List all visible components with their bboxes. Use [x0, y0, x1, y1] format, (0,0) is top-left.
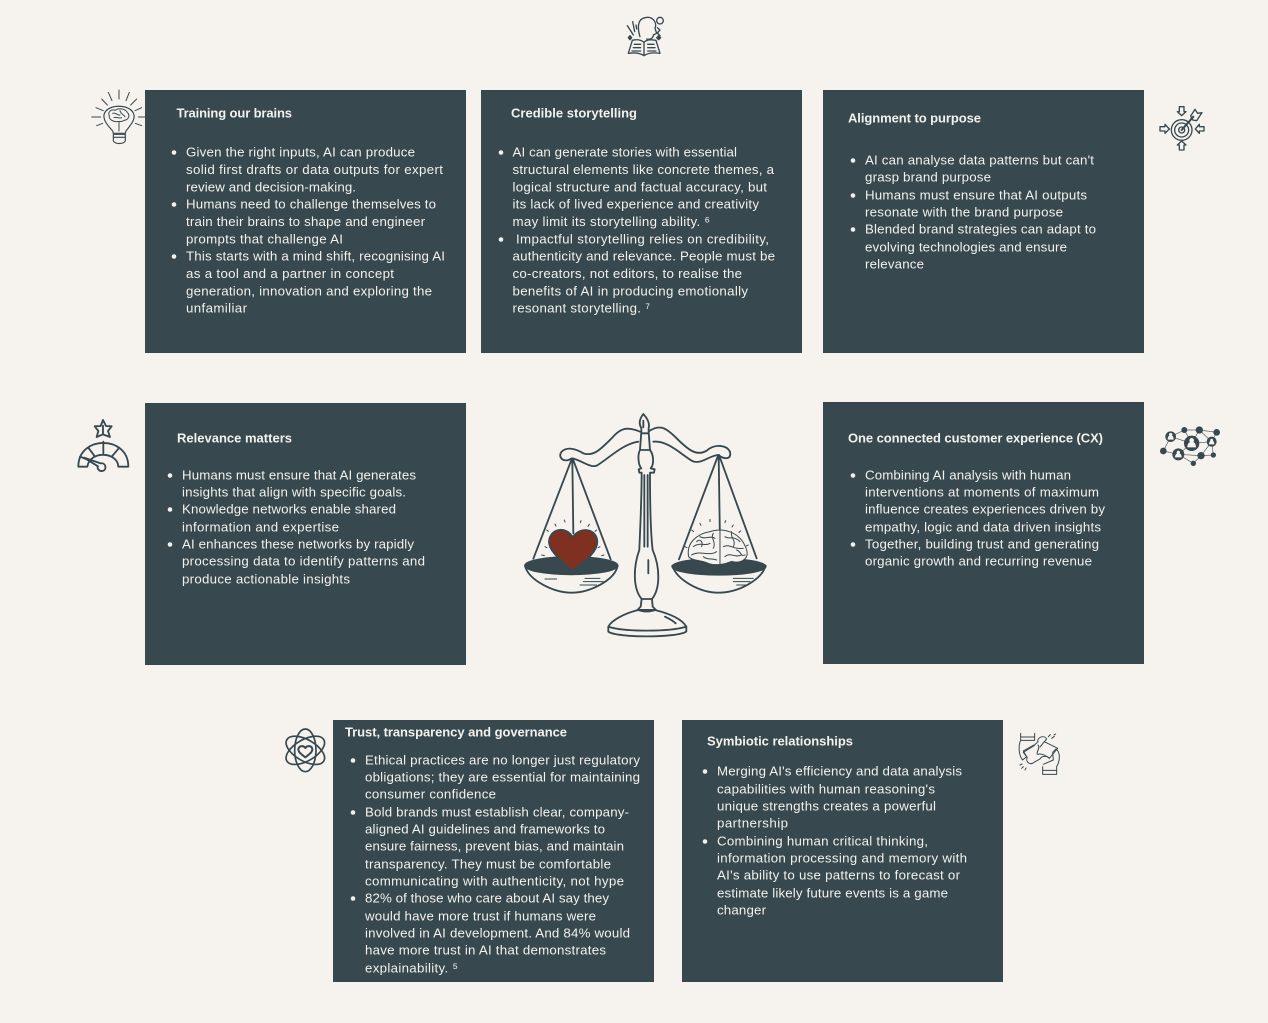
bullet list: Alignment to purpose: Humans must ensure that AI outputs: [865, 188, 1087, 202]
heading: Relevance matters: Relevance matters: [177, 430, 292, 446]
bullet list: Relevance matters: insights that align with specific goals.: [182, 484, 406, 500]
heading: One connected customer experience (CX): One connected customer experience (CX): [848, 430, 1103, 446]
bullet list: Training our brains: This starts with a mind shift, recognising AI: [186, 248, 445, 264]
bullet list: Credible storytelling: [499, 144, 775, 316]
bullet list: Training our brains: [172, 144, 445, 316]
heading: Credible storytelling: Credible storytelling: [511, 106, 637, 120]
heading: Training our brains: Training our brains: [176, 106, 292, 120]
bullet list: One connected customer experience: [851, 468, 1105, 568]
bullet list: Credible storytelling: logical structure and factual accuracy, but: [512, 180, 767, 194]
bullet list: Training our brains: as a tool and a partner in concept: [186, 266, 394, 281]
bullet list: Trust, transparency and governance: transparency. They must be comfortable: [365, 856, 611, 872]
bullet list: Trust, transparency and governance: explainability. ⁵: [365, 960, 458, 976]
bullet list: Credible storytelling: AI can generate stories with essential: [512, 144, 737, 160]
bullet list: Training our brains: Given the right inputs, AI can produce: [186, 144, 415, 160]
left pan strings: [533, 459, 611, 559]
bullet list: One connected customer experience: empathy, logic and data driven insights: [865, 520, 1101, 534]
bullet list: One connected customer experience: influence creates experiences driven by: [865, 502, 1105, 516]
bullet list: Trust, transparency and governance: 82% of those who care about AI say they: [365, 890, 609, 906]
bullet list: Symbiotic relationships: information processing and memory with: [717, 850, 967, 866]
rays: [685, 519, 748, 548]
heading: Symbiotic relationships: Symbiotic relationships: [707, 734, 853, 748]
bullet list: Symbiotic relationships: [703, 764, 967, 918]
icon: atom with heart: [282, 729, 329, 772]
bullet list: One connected customer experience: interventions at moments of maximum: [865, 484, 1099, 500]
brain: [688, 530, 747, 565]
rays: [542, 520, 604, 556]
bullet list: Alignment to purpose: evolving technologies and ensure: [865, 240, 1067, 254]
bullet list: Credible storytelling: may limit its storytelling ability. ⁶: [512, 214, 710, 229]
panel: Alignment to purpose: [823, 90, 1144, 353]
icon: open book with head: [627, 17, 663, 56]
bullet list: Trust, transparency and governance: obligations; they are essential for maintaining: [365, 770, 640, 784]
bullet list: Training our brains: Humans need to challenge themselves to: [186, 196, 436, 212]
panel: One connected customer experience: [823, 402, 1144, 664]
bullet list: Trust, transparency and governance: communicating with authenticity, not hype: [365, 874, 624, 888]
icon: hands joining puzzle pieces: [1019, 733, 1059, 774]
bullet list: Relevance matters: Knowledge networks enable shared: [182, 502, 396, 516]
heart: [549, 530, 597, 571]
bullet list: Alignment to purpose: relevance: [865, 256, 924, 272]
bullet list: Trust, transparency and governance: consumer confidence: [365, 786, 496, 802]
bullet list: One connected customer experience: Together, building trust and generating: [865, 536, 1099, 552]
bullet list: Symbiotic relationships: unique strengths creates a powerful: [717, 798, 936, 814]
bullet list: Trust, transparency and governance: Ethical practices are no longer just regulatory: [365, 752, 640, 768]
bullet list: Relevance matters: produce actionable insights: [182, 572, 350, 586]
beam: [560, 427, 730, 466]
panel: Symbiotic relationships: [682, 720, 1003, 982]
icon: people network: [1160, 426, 1220, 466]
bullet list: Trust, transparency and governance: have more trust in AI that demonstrates: [365, 942, 606, 958]
bullet list: Training our brains: unfamiliar: [186, 300, 248, 316]
bullet list: Credible storytelling: structural elements like concrete themes, a: [512, 162, 775, 177]
bullet list: Symbiotic relationships: Merging AI's efficiency and data analysis: [717, 764, 962, 778]
bullet list: Credible storytelling: Impactful storytelling relies on credibility,: [516, 232, 769, 246]
illustration: balance scale weighing heart and brain: [525, 414, 766, 636]
icon: lightbulb with brain: [92, 90, 146, 143]
bullet list: Trust, transparency and governance: [351, 752, 640, 976]
bullet list: Credible storytelling: its lack of lived experience and creativity: [512, 196, 759, 212]
base: [608, 610, 686, 636]
bullet list: Alignment to purpose: resonate with the brand purpose: [865, 204, 1063, 220]
bullet list: Symbiotic relationships: AI's ability to use patterns to forecast or: [717, 868, 961, 882]
left pan: [525, 566, 618, 593]
panel: Trust, transparency and governance: [333, 720, 654, 982]
panel: Training our brains: [145, 90, 466, 353]
bullet list: Credible storytelling: resonant storytelling. ⁷: [512, 300, 650, 316]
bullet list: Relevance matters: processing data to identify patterns and: [182, 554, 425, 568]
bullet list: Credible storytelling: benefits of AI in producing emotionally: [512, 284, 748, 298]
bullet list: Alignment to purpose: Blended brand strategies can adapt to: [865, 222, 1096, 236]
bullet list: Relevance matters: AI enhances these networks by rapidly: [182, 536, 414, 552]
bullet list: Alignment to purpose: grasp brand purpose: [865, 170, 991, 184]
bullet list: Relevance matters: [168, 468, 425, 586]
bullet list: Symbiotic relationships: changer: [717, 902, 767, 918]
bullet list: Trust, transparency and governance: would have more trust if humans were: [364, 908, 596, 924]
panel: Credible storytelling: [481, 90, 802, 353]
bullet list: Training our brains: review and decision-making.: [186, 180, 356, 194]
heading: Trust, transparency and governance: Trust, transparency and governance: [345, 724, 567, 740]
heading: Alignment to purpose: Alignment to purpose: [848, 110, 981, 126]
bullet list: Symbiotic relationships: estimate likely future events is a game: [717, 886, 948, 900]
bullet list: Training our brains: prompts that challenge AI: [186, 232, 343, 246]
bullet list: One connected customer experience: Combining AI analysis with human: [865, 468, 1071, 482]
bullet list: Trust, transparency and governance: ensure fairness, prevent bias, and maintain: [365, 838, 624, 854]
bullet list: Relevance matters: Humans must ensure that AI generates: [182, 468, 416, 482]
bullet list: Trust, transparency and governance: aligned AI guidelines and frameworks to: [365, 822, 605, 836]
bullet list: Symbiotic relationships: Combining human critical thinking,: [717, 834, 928, 848]
bullet list: Credible storytelling: co-creators, not editors, to realise the: [512, 266, 742, 281]
bullet list: Credible storytelling: authenticity and relevance. People must be: [512, 248, 775, 264]
bullet list: Training our brains: generation, innovation and exploring the: [186, 284, 432, 298]
bullet list: Alignment to purpose: [851, 152, 1096, 272]
bullet list: Training our brains: train their brains to shape and engineer: [186, 214, 426, 229]
bullet list: Symbiotic relationships: capabilities with human reasoning's: [717, 782, 935, 796]
bullet list: Trust, transparency and governance: Bold brands must establish clear, company-: [365, 804, 629, 820]
bullet list: Alignment to purpose: AI can analyse data patterns but can't: [865, 152, 1094, 168]
icon: target with arrows: [1160, 107, 1204, 150]
bullet list: One connected customer experience: organic growth and recurring revenue: [865, 554, 1092, 568]
right pan strings: [679, 455, 757, 564]
bullet list: Relevance matters: information and expertise: [182, 520, 339, 534]
panel: Relevance matters: [145, 403, 466, 665]
bullet list: Training our brains: solid first drafts or data outputs for expert: [186, 162, 443, 177]
bullet list: Trust, transparency and governance: involved in AI development. And 84% would: [365, 926, 630, 940]
post: [635, 414, 658, 610]
bullet list: Symbiotic relationships: partnership: [717, 816, 788, 830]
right pan: [672, 566, 766, 593]
icon: gauge with star: [78, 420, 128, 471]
